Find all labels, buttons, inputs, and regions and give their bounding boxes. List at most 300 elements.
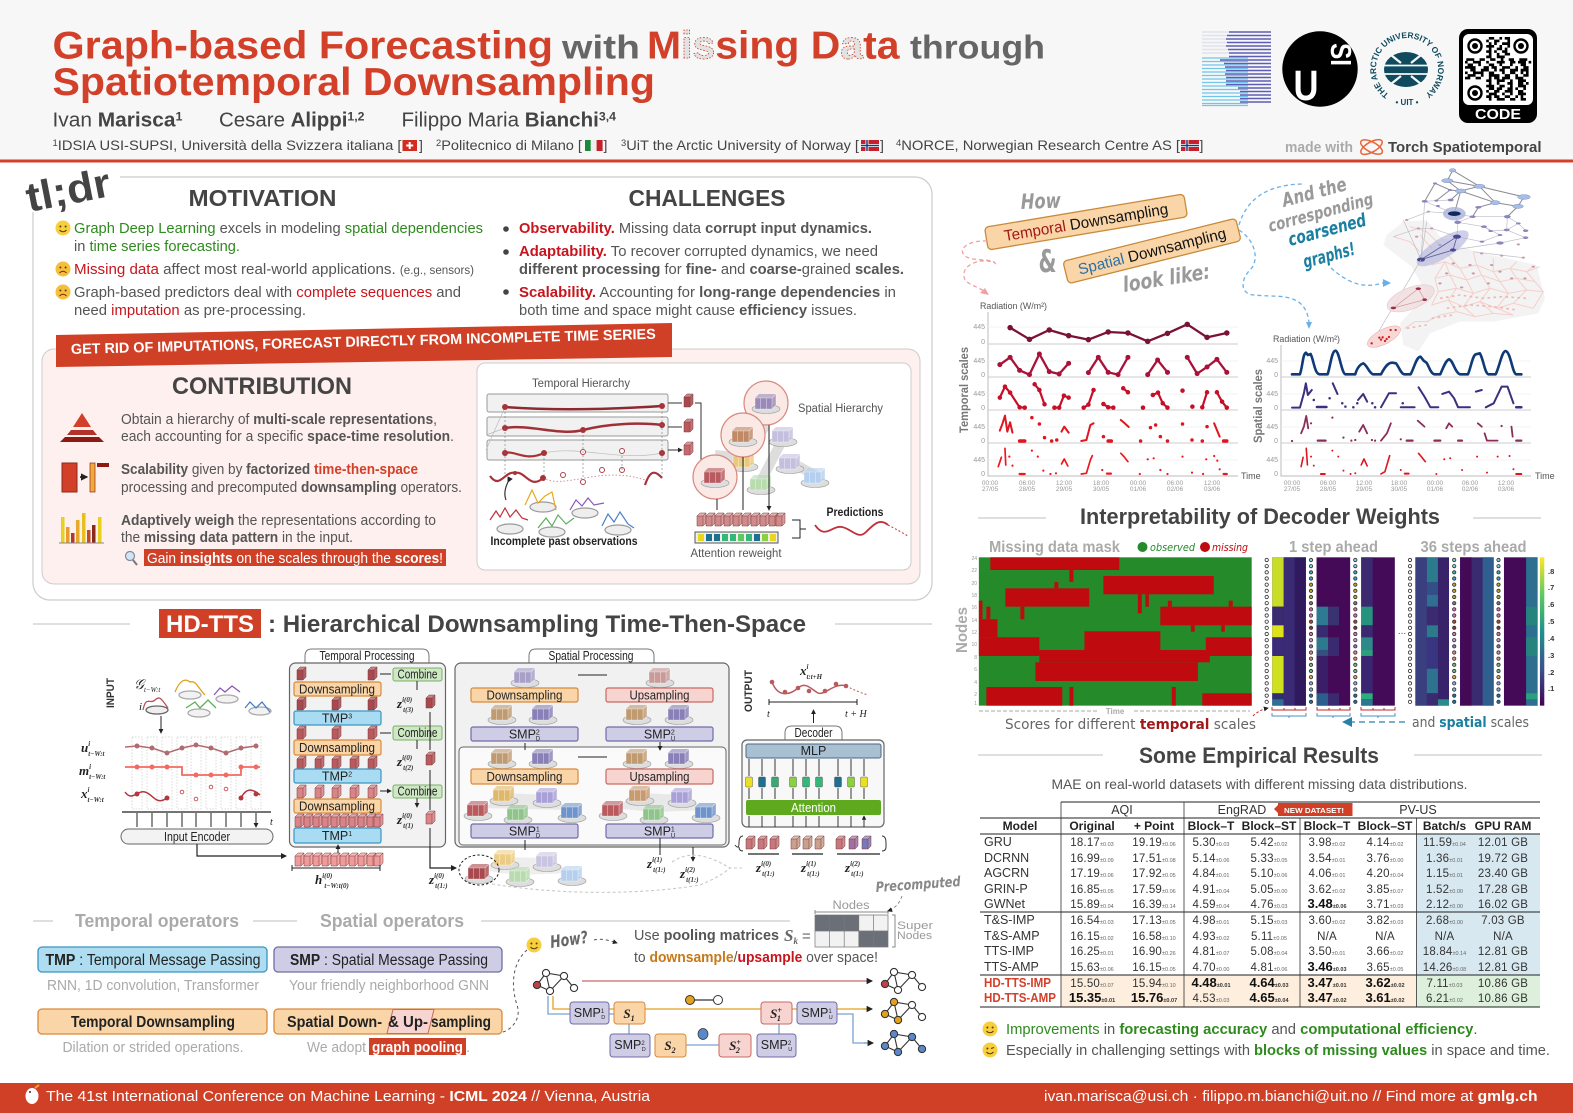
flow boxes: SMP [574, 1006, 601, 1020]
note: coarsened graphs: And the [1278, 173, 1349, 212]
down and upsampling boxes: D [536, 736, 541, 742]
handwritten intro [1020, 189, 1212, 297]
block 2 [1317, 557, 1350, 706]
pooling matrices text: Use pooling matrices [634, 927, 779, 944]
table rows: 19.72 GB [1478, 853, 1528, 865]
panel: decoder: Decoder [794, 726, 832, 740]
chart: temporal scales: 00:00 [1130, 480, 1147, 487]
heading: motivation: MOTIVATION [188, 185, 336, 211]
chart: spatial scales: 445 [1266, 391, 1278, 398]
chart: spatial scales: 12:00 [1356, 480, 1373, 487]
legend: missing data mask: missing [1212, 541, 1248, 554]
chart: temporal scales: 12:00 [1056, 480, 1073, 487]
legend: missing data mask [989, 539, 1248, 556]
heatmap: missing data mask: 22 [971, 568, 977, 574]
headings: steps ahead: 1 step ahead [1289, 539, 1378, 556]
table rows: 3.50±0.01 [1309, 946, 1345, 958]
table rows: 3.62±0.02 [1309, 884, 1345, 896]
downsampling and TMP boxes: TMP [322, 770, 348, 784]
combine boxes: Combine [398, 668, 438, 682]
tag: temporal downsampling: Temporal Downsampling [1003, 201, 1169, 245]
text: challenges list: both time and space might cause efficiency issues. [519, 302, 857, 319]
chart: temporal scales: Radiation (W/m²) [980, 301, 1047, 312]
flow boxes: S [729, 1038, 736, 1053]
table group headers [1111, 803, 1437, 817]
text: challenges list: Observability. Missing data corrupt input dynamics. [519, 220, 872, 237]
table rows: 3.82±0.03 [1367, 915, 1403, 927]
table rows: 3.61±0.02 [1365, 990, 1405, 1005]
input signals: t−W:t [88, 750, 106, 758]
flow boxes: 1 [777, 1014, 781, 1023]
made with Torch Spatiotemporal [1285, 137, 1542, 157]
takeaways: Especially in challenging settings with blocks of missing values in space and time. [1006, 1042, 1550, 1059]
chart: spatial scales: 0 [1274, 372, 1278, 379]
table rows: 14.26±0.08 [1423, 962, 1466, 974]
legend: missing data mask: observed [1150, 541, 1196, 554]
table rows: 16.39±0.14 [1132, 899, 1176, 911]
table rows: 3.98±0.02 [1309, 837, 1345, 849]
logo: USI [1282, 31, 1358, 110]
table rows: 16.25±0.01 [1070, 946, 1114, 958]
temporal hierarchy [486, 378, 701, 485]
colour bar labels: .2 [1548, 668, 1554, 677]
block 3 [1361, 557, 1395, 706]
note: coarsened graphs [1266, 173, 1376, 273]
affiliations: ] [419, 137, 423, 153]
headings: steps ahead [1289, 539, 1526, 556]
output graph red [881, 968, 926, 994]
pooling matrix: Precomputed [875, 874, 962, 896]
heatmap: missing data mask: 2 [974, 692, 977, 698]
table rows: 7.11±0.03 [1426, 978, 1463, 990]
table rows: 17.92±0.05 [1132, 868, 1176, 880]
table rows: 4.70±0.00 [1193, 962, 1229, 974]
block 4 [1415, 557, 1449, 706]
combine boxes: Combine [398, 784, 438, 798]
down and upsampling boxes: SMP [509, 728, 536, 742]
table rows: 17.59±0.06 [1132, 884, 1176, 896]
heatmap: missing data mask [954, 556, 1252, 716]
table rows: TTS-AMP [984, 960, 1039, 974]
output: OUTPUT [743, 670, 755, 712]
logo: IDSIA stripes [1202, 32, 1271, 106]
down and upsampling boxes: U [671, 736, 675, 742]
combine boxes: t(1) [403, 822, 413, 830]
down and upsampling boxes: 1 [671, 826, 675, 834]
table rows: 3.71±0.03 [1367, 899, 1403, 911]
spatial base level and outputs: t(1:) [686, 876, 699, 884]
authors: 1 [176, 110, 183, 124]
table rows: 5.15±0.03 [1251, 915, 1287, 927]
table rows: 4.20±0.04 [1367, 868, 1403, 880]
heatmap: missing data mask: Nodes [954, 607, 971, 653]
heading: challenges: CHALLENGES [628, 185, 786, 211]
input encoder [121, 829, 273, 844]
text: motivation list: Graph-based predictors deal with complete sequences and [74, 284, 461, 301]
table group headers: EngRAD [1218, 803, 1266, 817]
decoder inputs: t(1:) [807, 870, 820, 878]
heading: HD-TTS: HD-TTS [166, 611, 254, 638]
downsampling and TMP boxes: TMP [322, 712, 348, 726]
down and upsampling boxes: SMP [644, 824, 671, 838]
input block: i [139, 701, 142, 713]
table rows: N/A [1435, 931, 1455, 943]
table rows: 16.85±0.05 [1070, 884, 1114, 896]
table rows: 16.02 GB [1478, 899, 1528, 911]
output: t:t+H [806, 673, 823, 681]
authors: Ivan Marisca [52, 110, 172, 132]
spatial base level and outputs: i(0) [434, 872, 444, 880]
flow boxes: 1 [601, 1009, 605, 1015]
table group headers: AQI [1111, 803, 1133, 817]
chart: spatial scales: 445 [1266, 424, 1278, 431]
table column headers: Original [1069, 819, 1115, 833]
chart: temporal scales: Time [1241, 471, 1261, 481]
colour bar [1540, 557, 1544, 706]
made with Torch Spatiotemporal: Torch Spatiotemporal [1388, 140, 1542, 156]
text: scalability: processing and precomputed downsampling operators. [121, 479, 462, 496]
table rows: 7.03 GB [1481, 915, 1525, 927]
heatmaps: decoder weights [1272, 557, 1544, 706]
down and upsampling boxes: 1 [536, 826, 540, 834]
input block [105, 678, 271, 733]
table rows: 10.86 GB [1478, 993, 1528, 1005]
output graph blue [881, 1030, 926, 1056]
authors [52, 110, 616, 132]
text: scalability: Scalability given by factorized time-then-space [121, 461, 418, 478]
operator: SMP [274, 947, 502, 994]
table rows: 4.76±0.03 [1251, 899, 1287, 911]
header band [0, 0, 1573, 162]
down and upsampling boxes: SMP [509, 824, 536, 838]
combine boxes: z [397, 696, 402, 711]
colour bar labels: .4 [1548, 634, 1555, 643]
pooling matrices text: k [793, 936, 798, 946]
chart: spatial scales: 0 [1274, 471, 1278, 478]
flow boxes: SMP [761, 1038, 788, 1052]
down and upsampling boxes: 2 [671, 730, 675, 736]
table rows: 12.81 GB [1478, 946, 1528, 958]
table rows: 3.54±0.01 [1309, 853, 1345, 865]
flow boxes: + [736, 1038, 741, 1047]
chart: temporal scales: 445 [973, 457, 985, 464]
title: Graph-based Forecasting [52, 24, 553, 68]
table rows: 10.86 GB [1478, 978, 1528, 990]
logo: USI: SI [1324, 43, 1356, 66]
down and upsampling boxes: U [671, 834, 675, 840]
table rows: 12.01 GB [1478, 837, 1528, 849]
chart: temporal scales: 445 [973, 391, 985, 398]
operator: spatial down and up sampling: Spatial Down- [287, 1014, 382, 1031]
flow boxes: SMP [801, 1006, 828, 1020]
heatmap: missing data mask: 10 [971, 642, 977, 648]
table rows: 1.52±0.00 [1426, 884, 1463, 896]
down and upsampling boxes: Downsampling [486, 688, 563, 702]
chart: temporal scales [957, 301, 1261, 493]
operator: SMP: SMP : Spatial Message Passing [290, 952, 488, 969]
diagram: graph pooling flow [533, 968, 926, 1057]
chart: temporal scales: 06:00 [1167, 480, 1184, 487]
flow boxes: D [601, 1015, 605, 1021]
table rows: 15.63±0.06 [1070, 962, 1114, 974]
table rows: 5.33±0.05 [1251, 853, 1287, 865]
table column headers: Batch/s [1423, 819, 1466, 833]
flow boxes: 1 [631, 1014, 635, 1023]
combine boxes: i(0) [402, 812, 412, 820]
table column headers: Block–ST [1358, 819, 1413, 833]
diagram: HD-TTS architecture [79, 649, 886, 892]
panel: decoder: Attention [791, 801, 836, 815]
attention reweight [690, 513, 806, 560]
chart: temporal scales: 02/06 [1167, 486, 1184, 493]
chart: temporal scales: 0 [981, 438, 985, 445]
logo: UiT: • UIT • [1396, 98, 1419, 107]
colour bar labels: .1 [1548, 684, 1554, 693]
heading: HD-TTS [33, 609, 932, 638]
input block: 𝒢 [134, 678, 144, 693]
text: hierarchy [121, 411, 454, 445]
chart: temporal scales: 445 [973, 324, 985, 331]
input encoder: Input Encoder [164, 830, 230, 844]
table rows: 5.05±0.00 [1251, 884, 1287, 896]
table rows: 16.58±0.10 [1132, 931, 1176, 943]
chart: temporal scales: 01/06 [1130, 486, 1147, 493]
operator: temporal downsampling [38, 1009, 267, 1056]
combine boxes: z [397, 754, 402, 769]
heatmap: missing data mask: 14 [971, 618, 977, 624]
chart: temporal scales: 29/05 [1056, 486, 1073, 493]
affiliations: 2 [436, 138, 441, 148]
table column headers: GPU RAM [1475, 819, 1531, 833]
handwritten intro: look like: [1121, 259, 1212, 297]
decoder inputs: z [845, 860, 850, 875]
table rows: 6.21±0.02 [1426, 993, 1463, 1005]
embeddings: h [315, 872, 322, 887]
affiliations: ] [1200, 137, 1203, 153]
table rows: N/A [1317, 931, 1337, 943]
input signals [79, 737, 273, 828]
table rows: 3.65±0.05 [1367, 962, 1403, 974]
chart: temporal scales: 18:00 [1093, 480, 1110, 487]
table rows: 3.85±0.07 [1367, 884, 1403, 896]
label: incomplete past observations: Incomplete past observations [490, 536, 638, 548]
table rows: 5.10±0.06 [1251, 868, 1287, 880]
combine boxes: t(2) [403, 764, 413, 772]
text: hierarchy: Obtain a hierarchy of multi-scale representations, [121, 411, 437, 428]
table rows: GRU [984, 835, 1012, 849]
chart: temporal scales: 30/05 [1093, 486, 1110, 493]
chart: spatial scales: 445 [1266, 358, 1278, 365]
output graph orange [881, 998, 926, 1024]
chart: spatial scales: 06:00 [1320, 480, 1337, 487]
downsampling and TMP boxes [294, 682, 381, 843]
table rows: 4.64±0.03 [1249, 975, 1289, 990]
table rows: DCRNN [984, 851, 1029, 865]
chart: spatial scales: 0 [1274, 405, 1278, 412]
chart: spatial scales: 29/05 [1356, 486, 1373, 493]
flow boxes: 2 [788, 1041, 792, 1047]
downsampling and TMP boxes: Downsampling [299, 800, 375, 814]
flow boxes: + [777, 1006, 782, 1015]
operator: spatial down and up sampling: sampling [431, 1014, 491, 1031]
table rows: GWNet [984, 897, 1026, 911]
flow boxes: U [788, 1047, 792, 1053]
operator: temporal downsampling: Dilation or strided operations. [62, 1040, 244, 1056]
operators headings: Temporal operators [75, 911, 239, 931]
footer: The 41st International Conference on Machine Learning - ICML 2024 // Vienna, Austria [46, 1088, 651, 1105]
authors: Cesare Alippi [219, 110, 346, 132]
operator: spatial down and up sampling: graph pooling [372, 1040, 463, 1056]
heatmap: missing data mask: Time [1106, 707, 1125, 716]
table rows: 4.06±0.01 [1309, 868, 1345, 880]
decoder inputs: t(1:) [851, 870, 864, 878]
down and upsampling boxes: 2 [536, 730, 540, 736]
combine boxes: Combine [398, 726, 438, 740]
table rows: 17.19±0.06 [1070, 868, 1114, 880]
footer: ivan.marisca@usi.ch · filippo.m.bianchi@uit.no // Find more at gmlg.ch [1044, 1088, 1538, 1105]
table rows: 16.15±0.02 [1070, 931, 1114, 943]
table rows: N/A [1493, 931, 1513, 943]
text: challenges list: different processing for fine- and coarse-grained scales. [519, 261, 904, 278]
table rows: 18.17±0.03 [1070, 837, 1114, 849]
operator: TMP: TMP : Temporal Message Passing [46, 952, 260, 969]
title: Missing Data [647, 24, 900, 68]
table rows: 2.12±0.00 [1426, 899, 1463, 911]
table rows: 17.13±0.05 [1132, 915, 1176, 927]
badge: new dataset [1274, 803, 1352, 816]
node chains [1265, 558, 1500, 703]
table rows: 3.60±0.02 [1309, 915, 1345, 927]
icon: pyramid [60, 413, 104, 442]
input signals: t [270, 817, 273, 828]
down and upsampling boxes: D [536, 834, 541, 840]
table rows: 11.59±0.04 [1423, 837, 1466, 849]
table rows: 12.81 GB [1478, 962, 1528, 974]
table column headers [1003, 819, 1531, 833]
chart: spatial scales: 00:00 [1427, 480, 1444, 487]
embeddings: i(0) [322, 872, 332, 880]
output [743, 663, 868, 723]
operator: spatial down and up sampling: & Up- [388, 1014, 428, 1031]
heatmap: missing data mask: 18 [971, 593, 977, 599]
embeddings [292, 845, 383, 890]
flow boxes: U [829, 1015, 833, 1021]
chart: spatial scales: Spatial scales [1251, 369, 1265, 443]
flow boxes [570, 1002, 837, 1057]
input signals: t−W:t [87, 796, 105, 804]
table rows: 3.76±0.00 [1367, 853, 1403, 865]
input signals: t−W:t [89, 773, 106, 781]
annotation: temporal scales [1005, 708, 1268, 733]
table rows: 16.15±0.05 [1132, 962, 1176, 974]
chart: temporal scales: 0 [981, 372, 985, 379]
decoder inputs: i(0) [761, 860, 771, 868]
affiliations: ] [880, 137, 884, 153]
table rows: N/A [1375, 931, 1395, 943]
heading: empirical results: Some Empirical Results [1139, 743, 1379, 768]
table rows: 4.81±0.06 [1251, 962, 1287, 974]
decoder inputs: i(1) [806, 860, 816, 868]
input signals: m [79, 763, 89, 778]
decoder inputs: t(1:) [762, 870, 775, 878]
output: t [767, 709, 770, 720]
attention reweight: Attention reweight [690, 548, 782, 560]
table column headers: Model [1003, 819, 1037, 833]
chart: spatial scales: 02/06 [1462, 486, 1479, 493]
output: i [806, 663, 808, 671]
down and upsampling boxes: Upsampling [630, 770, 690, 784]
output: t + H [845, 709, 868, 720]
handwritten intro: & [1038, 244, 1056, 280]
table rows: 3.66±0.02 [1367, 946, 1403, 958]
chart: temporal scales: Temporal scales [957, 347, 971, 433]
heatmap: missing data mask: 24 [971, 556, 977, 562]
downsampling and TMP boxes: Downsampling [299, 682, 375, 696]
input signals: i [89, 763, 91, 771]
flow boxes: S [770, 1006, 777, 1021]
authors: 1,2 [347, 110, 365, 124]
heatmap: missing data mask: 8 [974, 655, 977, 661]
table rows: 4.93±0.02 [1193, 931, 1229, 943]
table rows: 4.98±0.01 [1193, 915, 1229, 927]
pooling matrices text: S [784, 926, 793, 945]
table: results [980, 802, 1540, 1007]
made with Torch Spatiotemporal: made with [1285, 140, 1353, 156]
chart: temporal scales: 06:00 [1019, 480, 1036, 487]
table rows: 3.47±0.02 [1307, 990, 1347, 1005]
chart: spatial scales: 18:00 [1391, 480, 1408, 487]
table rows: 17.51±0.08 [1132, 853, 1176, 865]
decoder inputs [735, 836, 886, 878]
operator: spatial down and up sampling: . [466, 1040, 470, 1056]
badge: new dataset: NEW DATASET! [1284, 806, 1344, 815]
heatmap: missing data mask: 20 [971, 581, 977, 587]
pooling matrix: Super [897, 920, 933, 932]
title: with [561, 28, 640, 66]
text: motivation list [56, 220, 483, 319]
table column headers: Block–T [1304, 819, 1351, 833]
icon: weighted bars [59, 513, 104, 543]
icon: mascot [26, 1085, 39, 1104]
table rows: 15.89±0.04 [1070, 899, 1114, 911]
chart: spatial scales: 00:00 [1284, 480, 1301, 487]
note: coarsened graphs: coarsened [1286, 210, 1369, 251]
text: challenges list: Scalability. Accounting for long-range dependencies in [519, 284, 896, 301]
table rows: 2.68±0.00 [1426, 915, 1463, 927]
pooling matrix: Nodes [897, 930, 933, 942]
chart: temporal scales: 12:00 [1204, 480, 1221, 487]
brackets: scales [1272, 707, 1395, 718]
table rows: 4.91±0.04 [1193, 884, 1229, 896]
panel: decoder: MLP [801, 744, 826, 758]
table rows: T&S-AMP [984, 929, 1040, 943]
arrow: encoder to embeddings [197, 844, 286, 856]
text: hierarchy: each accounting for a specific space-time resolution. [121, 428, 454, 445]
table rows: 5.30±0.03 [1193, 837, 1229, 849]
down and upsampling boxes: Upsampling [630, 688, 690, 702]
tl;dr tag: tl;dr [22, 159, 114, 221]
temporal hierarchy: Temporal Hierarchy [532, 378, 630, 390]
combine boxes: i(0) [402, 754, 412, 762]
table group headers: PV-US [1399, 803, 1437, 817]
panel: decoder [742, 726, 884, 827]
text: motivation list: need imputation as pre-processing. [74, 302, 306, 319]
heatmap: missing data mask: 16 [971, 605, 977, 611]
how callout: How? [549, 928, 589, 953]
heatmap: missing data mask: 12 [971, 630, 977, 636]
block 1 [1272, 557, 1306, 706]
chart: temporal scales: 445 [973, 358, 985, 365]
